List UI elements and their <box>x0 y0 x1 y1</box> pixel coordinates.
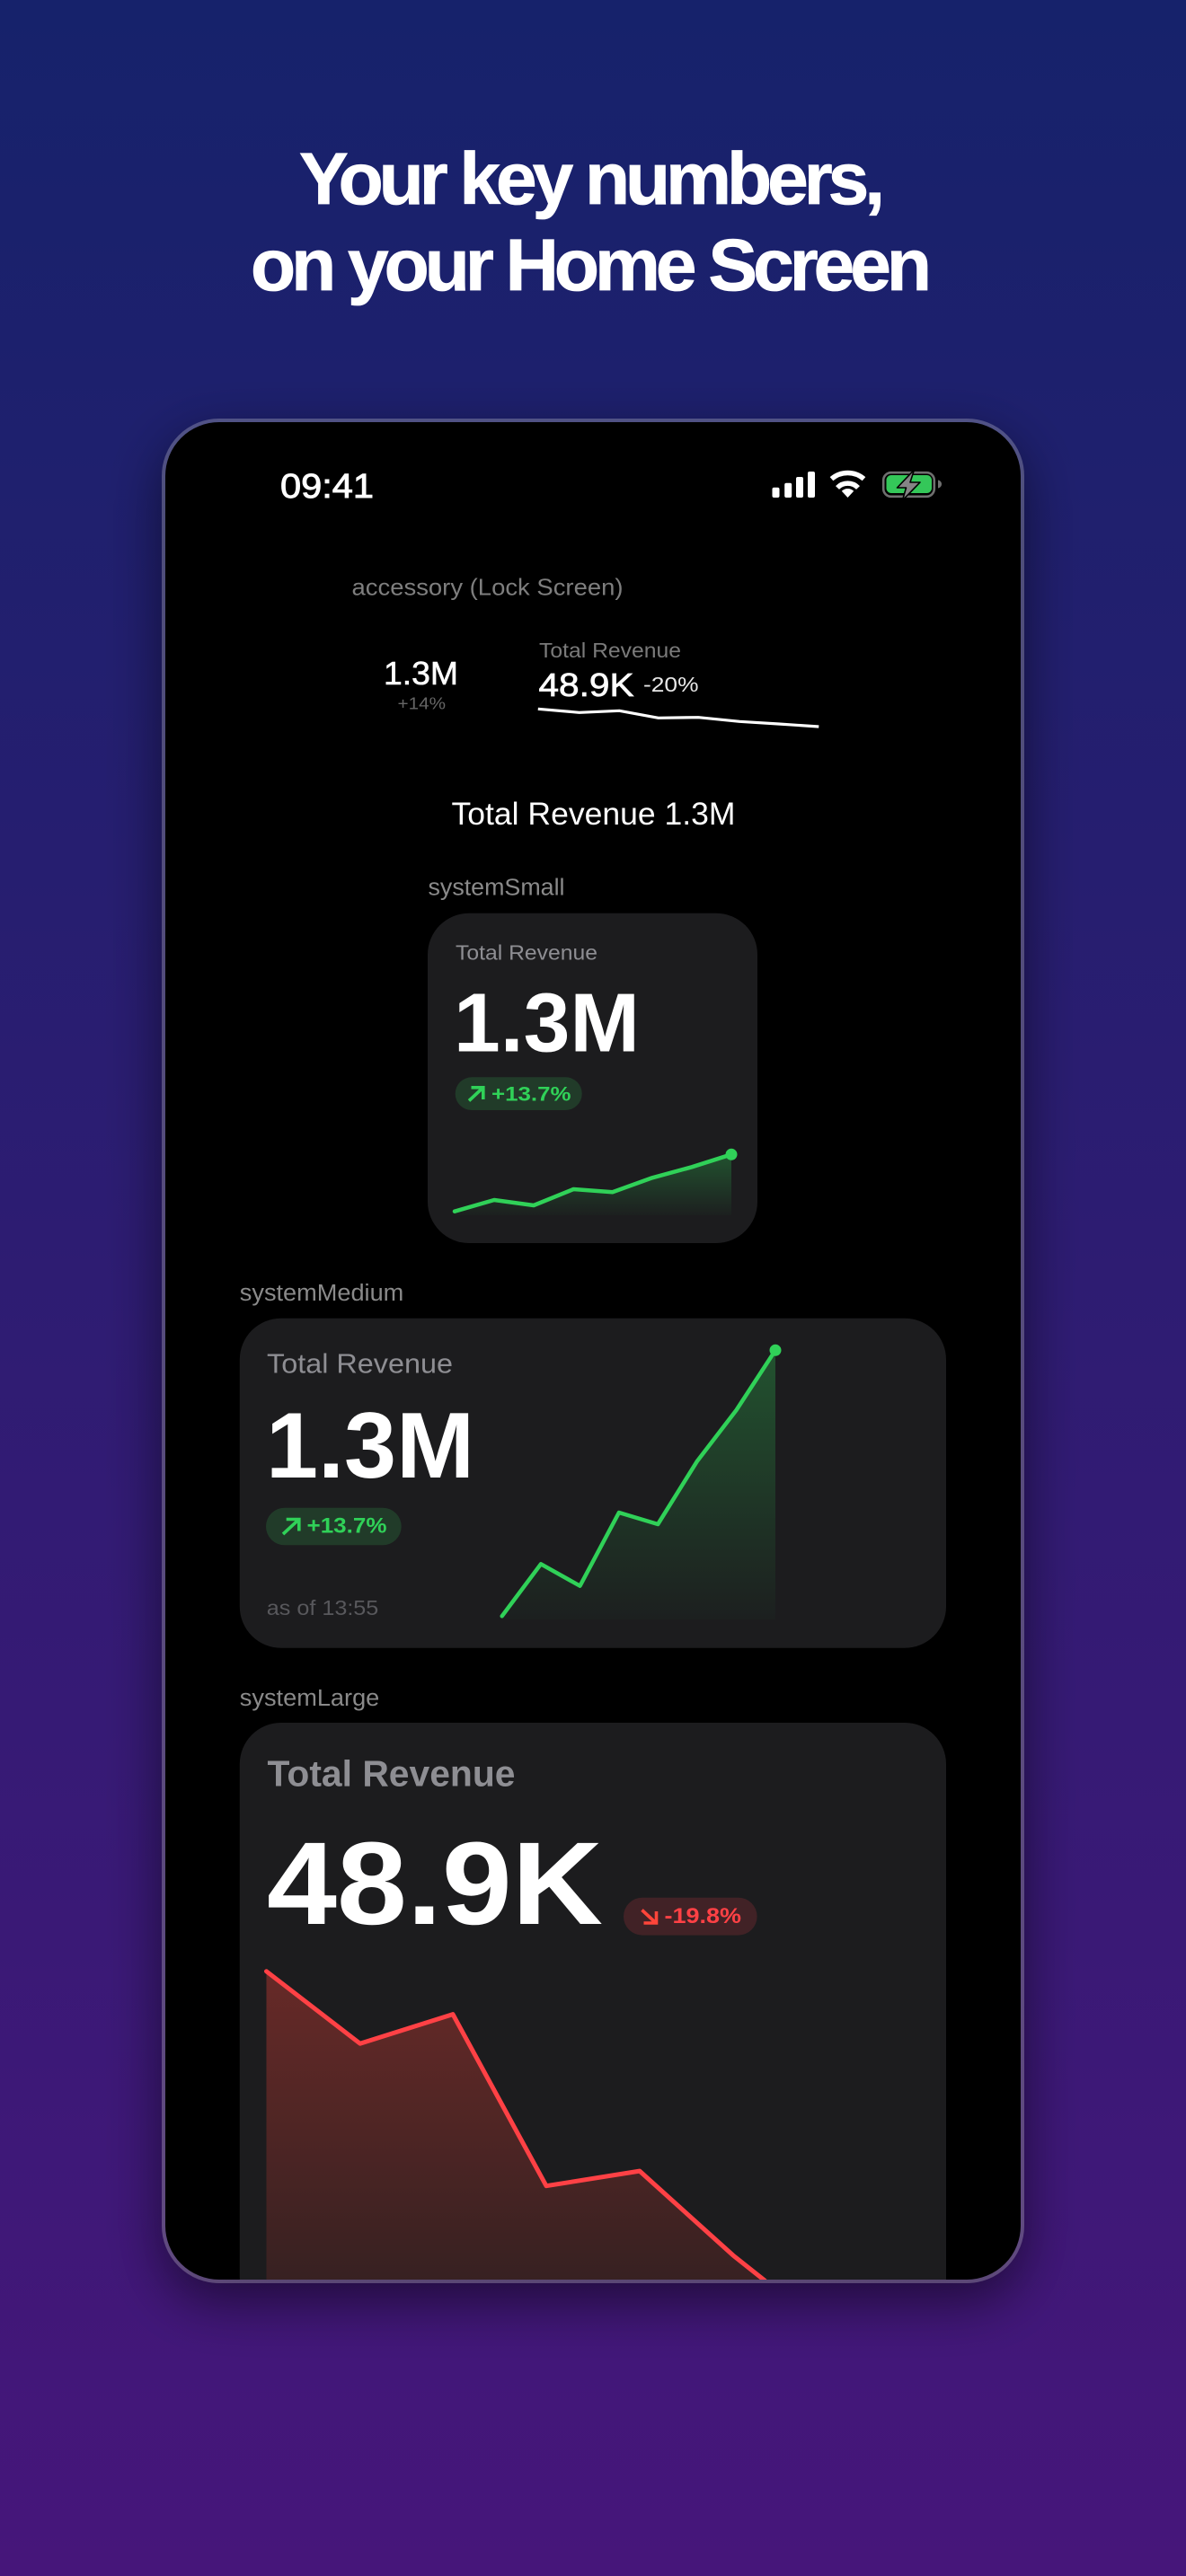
widget heading: Total Revenue <box>268 1753 516 1795</box>
panel: medium widget <box>240 1319 946 1648</box>
section label: systemLarge: systemLarge <box>240 1686 379 1711</box>
panel: small widget <box>428 913 757 1243</box>
change pill <box>456 1077 582 1110</box>
panel: large widget <box>239 1723 946 2280</box>
widget heading: Total Revenue <box>267 1347 453 1379</box>
metric value: 1.3M <box>266 1394 474 1498</box>
rectangular accessory widget: -20% <box>643 673 699 696</box>
section label: accessory: accessory (Lock Screen) <box>352 574 624 601</box>
area chart <box>455 1149 737 1215</box>
rectangular accessory widget <box>538 639 819 727</box>
change pill: -19.8% <box>665 1904 741 1928</box>
inline accessory text: Total Revenue 1.3M <box>451 797 735 832</box>
title <box>251 138 932 306</box>
area chart <box>264 1969 767 2280</box>
change pill: +13.7% <box>491 1083 571 1106</box>
status bar time: 09:41 <box>280 468 374 506</box>
change pill <box>266 1508 402 1545</box>
circular accessory widget: 1.3M <box>384 655 458 692</box>
widget heading: Total Revenue <box>456 941 597 965</box>
rectangular accessory widget: Total Revenue <box>539 639 681 662</box>
change pill: +13.7% <box>307 1514 386 1539</box>
area chart <box>502 1345 782 1619</box>
circular accessory widget: +14% <box>397 693 446 712</box>
sparkline <box>538 709 819 727</box>
section label: systemMedium: systemMedium <box>240 1281 403 1306</box>
title: Your key numbers, <box>299 138 885 220</box>
icon: charging battery <box>883 470 942 500</box>
circular accessory widget <box>386 661 456 710</box>
metric value: 1.3M <box>454 976 640 1070</box>
rectangular accessory widget: 48.9K <box>539 666 634 703</box>
title: on your Home Screen <box>251 225 932 306</box>
section label: systemSmall: systemSmall <box>428 876 564 901</box>
icon: cellular signal <box>773 472 815 498</box>
timestamp: as of 13:55 <box>267 1596 378 1619</box>
change pill <box>624 1898 757 1936</box>
phone mockup <box>164 420 1022 2425</box>
metric value: 48.9K <box>267 1817 603 1949</box>
icon: wifi <box>832 472 864 498</box>
phone shadow <box>162 437 1024 2302</box>
